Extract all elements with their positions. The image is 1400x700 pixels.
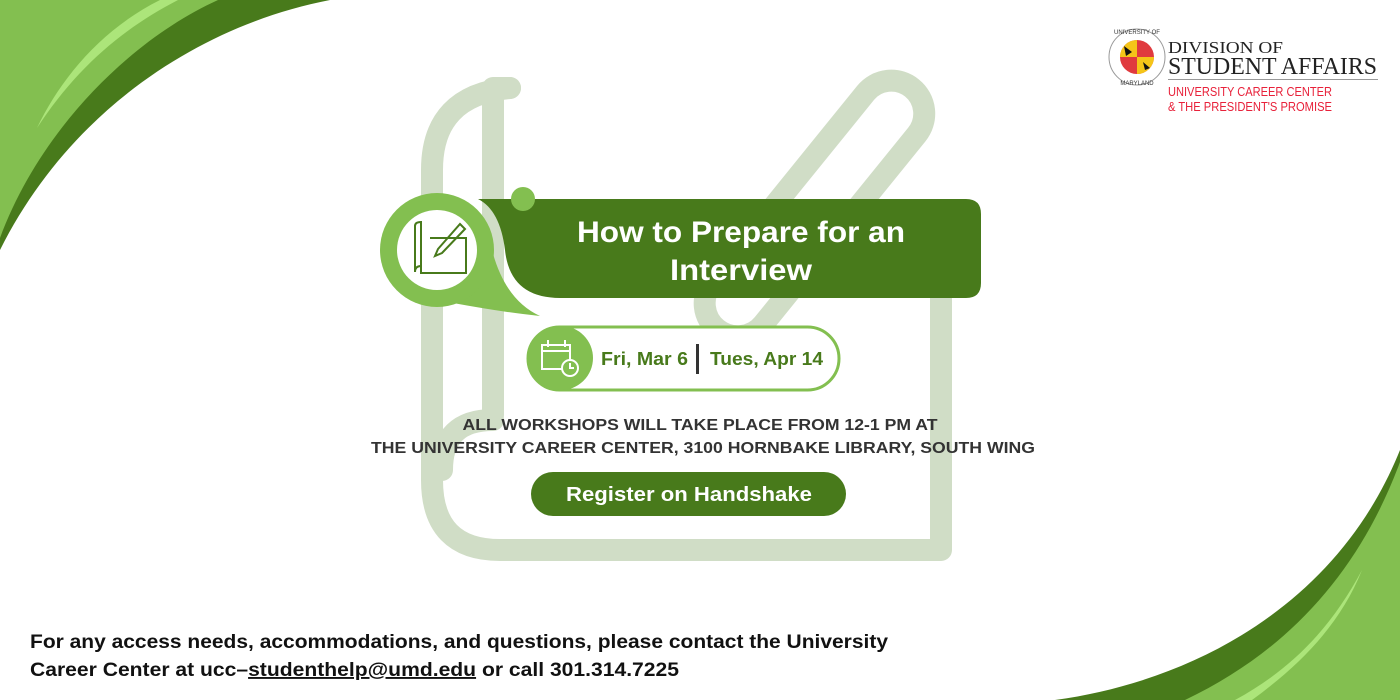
title banner: Interview [670,254,813,287]
logo [1109,29,1378,114]
footer contact text [30,632,888,681]
footer contact text: Career Center at ucc– studenthelp@umd.edu or call 301.314.7225 [30,660,679,681]
title text: How to Prepare for an [577,216,905,249]
logo: STUDENT AFFAIRS [1168,54,1377,80]
background icon: scroll and pencil [432,67,941,550]
seal: MARYLAND [1120,81,1154,87]
footer contact text: For any access needs, accommodations, and questions, please contact the University [30,632,888,653]
icon: calendar clock [542,340,578,376]
logo: & THE PRESIDENT'S PROMISE [1168,99,1332,114]
register button: Register on Handshake [566,484,812,506]
seal: UNIVERSITY OF [1114,30,1160,36]
title banner [380,187,981,316]
location text [371,417,1035,457]
date pill [528,326,839,390]
seal [1109,29,1165,87]
register button [531,472,846,516]
location text: ALL WORKSHOPS WILL TAKE PLACE FROM 12-1 PM AT [462,417,938,434]
decoration: bottom-right swoosh [1055,450,1400,700]
logo: UNIVERSITY CAREER CENTER [1168,84,1332,99]
date pill: Fri, Mar 6 [601,349,688,369]
location text: THE UNIVERSITY CAREER CENTER, 3100 HORNBAKE LIBRARY, SOUTH WING [371,440,1035,457]
date pill: Tues, Apr 14 [710,349,823,369]
title bubble with icon [380,193,540,316]
decoration: top-left swoosh [0,0,330,250]
logo: DIVISION OF [1168,38,1283,57]
